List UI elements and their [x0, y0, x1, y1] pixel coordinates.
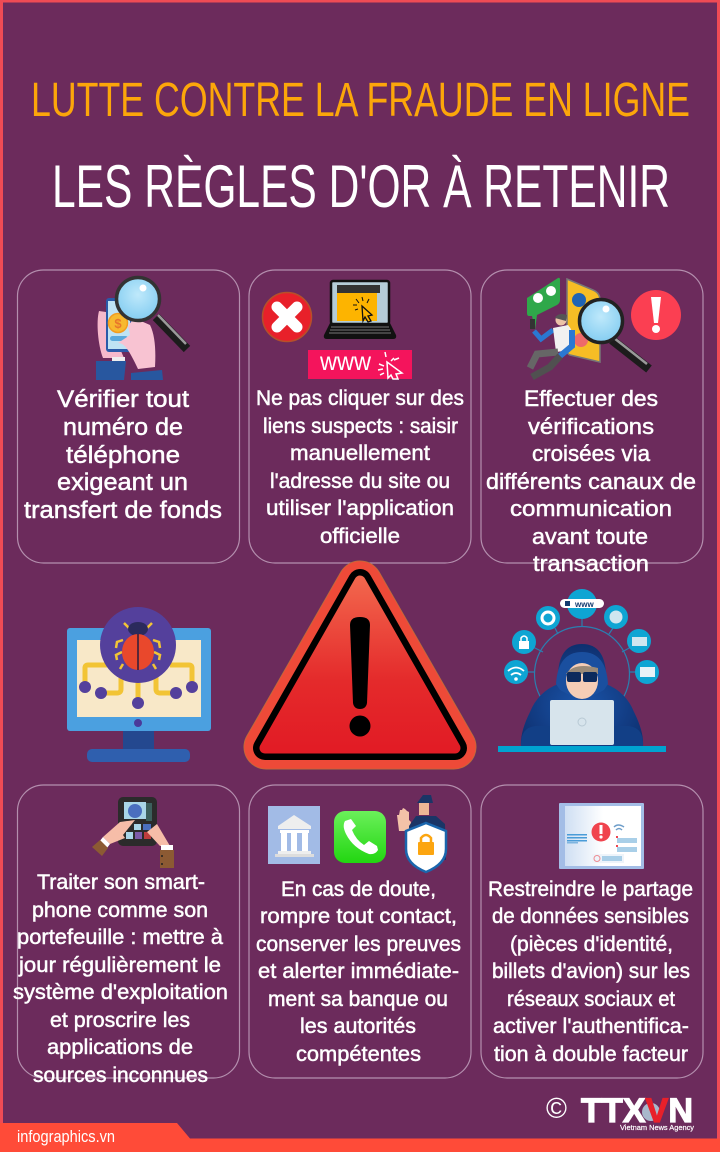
- icon: red cross: [262, 292, 312, 342]
- text block: billets d'avion) sur les: [492, 959, 690, 983]
- panel: verify phone number: [18, 270, 240, 563]
- text block: les autorités: [300, 1014, 416, 1038]
- text block: téléphone: [66, 442, 180, 469]
- text block: réseaux sociaux et: [507, 987, 675, 1011]
- text block: Traiter son smart-: [37, 870, 205, 894]
- icon: hacker: www: [574, 600, 594, 609]
- text block: liens suspects : saisir: [263, 414, 458, 438]
- icon: tablet and hands: [92, 797, 174, 868]
- text block: transaction: [533, 551, 649, 576]
- text block: applications de: [47, 1035, 193, 1059]
- text block: vérifications: [528, 414, 654, 439]
- text block: transfert de fonds: [24, 497, 222, 524]
- text block: utiliser l'application: [266, 496, 454, 520]
- panel: cross-checks: [481, 270, 703, 576]
- text block: activer l'authentifica-: [493, 1014, 689, 1038]
- text block: Effectuer des: [524, 386, 658, 411]
- text block: officielle: [320, 524, 400, 548]
- panel: restrict sensitive data: [481, 785, 703, 1078]
- icon: warning triangle: [265, 581, 455, 748]
- text block: rompre tout contact,: [260, 904, 457, 928]
- panel: in case of doubt: [249, 785, 471, 1078]
- text block: système d'exploitation: [13, 980, 228, 1004]
- text block: conserver les preuves: [256, 932, 461, 956]
- text block: [486, 386, 696, 576]
- icon: www banner: www: [319, 348, 372, 376]
- text block: [256, 386, 464, 548]
- footer site name: infographics.vn: [17, 1127, 115, 1146]
- text block: Restreindre le partage: [488, 877, 693, 901]
- text block: compétentes: [296, 1042, 421, 1066]
- text block: l'adresse du site ou: [270, 469, 450, 493]
- text block: En cas de doute,: [281, 877, 436, 901]
- logo: TTXVN: Vietnam News Agency: [620, 1123, 694, 1132]
- icon: policeman with shield: [397, 795, 446, 872]
- exclamation mark: [350, 617, 370, 736]
- icon: alert window: [559, 803, 644, 869]
- icon: monitor with bug: [67, 607, 211, 762]
- text block: portefeuille : mettre à: [17, 925, 223, 949]
- text block: (pièces d'identité,: [510, 932, 673, 956]
- text block: et proscrire les: [50, 1008, 190, 1032]
- text block: [256, 877, 461, 1066]
- icon: phone app: [334, 811, 386, 863]
- text block: sources inconnues: [33, 1063, 208, 1087]
- text block: [13, 870, 228, 1087]
- text block: jour régulièrement le: [18, 953, 221, 977]
- text block: croisées via: [532, 441, 650, 466]
- text block: exigeant un: [57, 469, 188, 496]
- text block: différents canaux de: [486, 469, 696, 494]
- panel: smartphone as wallet: [13, 785, 240, 1087]
- text block: [488, 877, 693, 1066]
- text block: Vérifier tout: [57, 386, 189, 413]
- icon: hacker: [498, 589, 666, 752]
- icon: phone and magnifier: $: [114, 316, 122, 331]
- icon: laptop: [324, 281, 396, 339]
- text block: et alerter immédiate-: [258, 959, 459, 983]
- footer bar: [0, 1123, 720, 1152]
- icon: bank: [268, 806, 320, 864]
- icon: www banner: [308, 348, 412, 379]
- icon: phone and magnifier: [96, 278, 187, 380]
- logo: TTXVN: TTXVN: [581, 1092, 693, 1130]
- copyright symbol: ©: [546, 1093, 567, 1125]
- text block: Ne pas cliquer sur des: [256, 386, 464, 410]
- text block: numéro de: [63, 414, 183, 441]
- text block: tion à double facteur: [494, 1042, 688, 1066]
- text block: phone comme son: [32, 898, 208, 922]
- icon: phone, person and magnifier: [527, 278, 681, 377]
- panel: suspicious links: [249, 270, 471, 563]
- text block: manuellement: [290, 441, 430, 465]
- text block: [24, 386, 222, 524]
- text block: communication: [510, 496, 672, 521]
- text block: ment sa banque ou: [268, 987, 448, 1011]
- text block: avant toute: [532, 524, 648, 549]
- text block: de données sensibles: [492, 904, 689, 928]
